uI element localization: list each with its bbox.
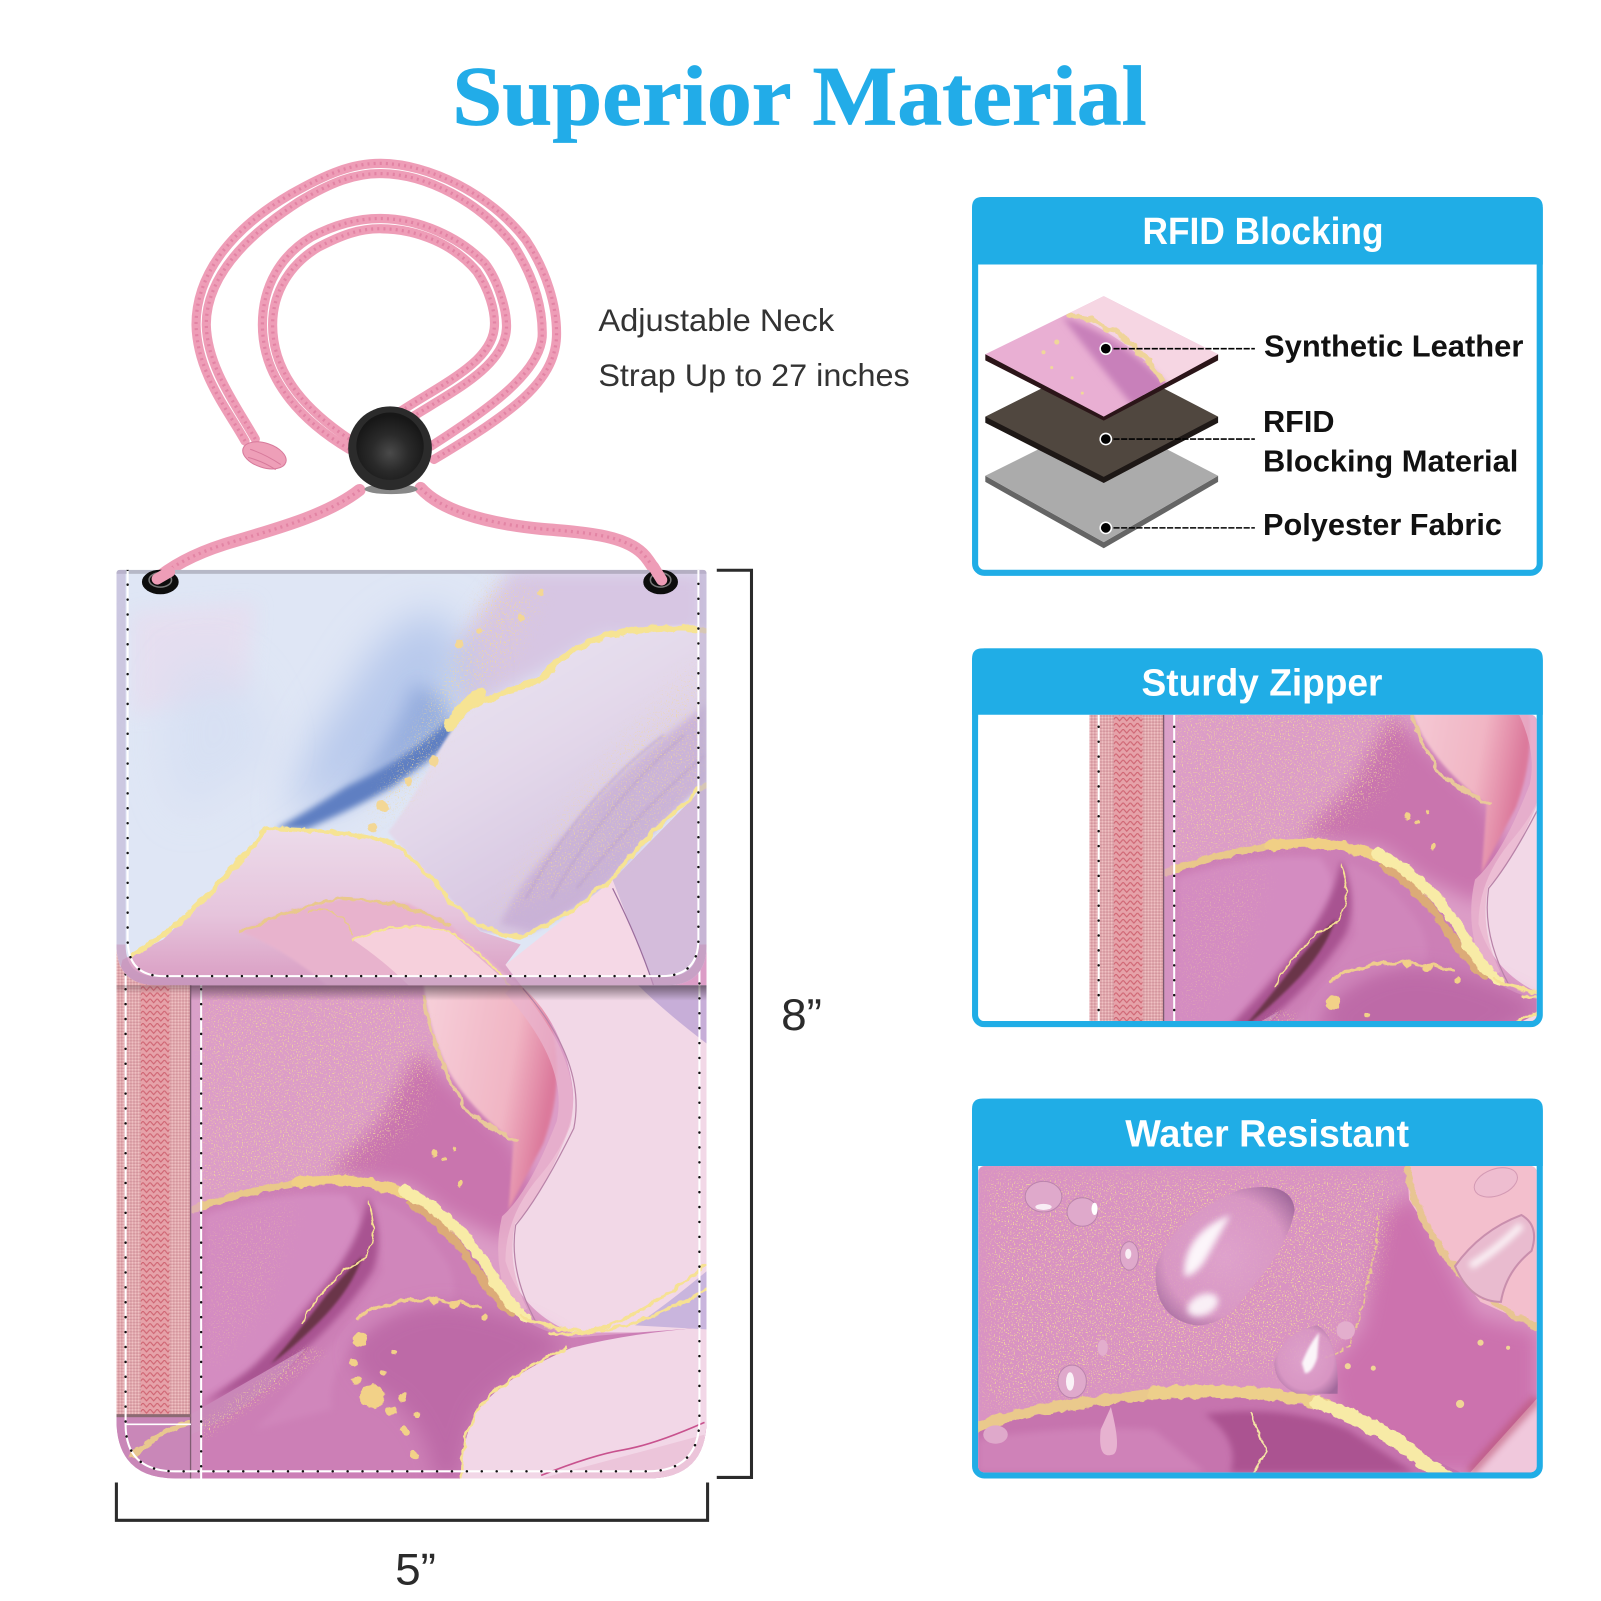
height label: 8” [781, 989, 822, 1040]
panel frame [975, 1102, 1540, 1475]
panel header [972, 648, 1543, 715]
callout: synthetic leather [1100, 329, 1523, 363]
panel: Water Resistant [972, 1099, 1543, 1478]
panel frame [975, 200, 1540, 573]
left grommet [142, 570, 179, 594]
width label: 5” [395, 1544, 436, 1595]
layer: RFID blocking material [985, 357, 1218, 483]
panel: Sturdy Zipper [972, 648, 1543, 1028]
marble close-up [978, 1166, 1537, 1478]
pouch flap [116, 570, 707, 985]
rope ends [157, 567, 662, 580]
pouch [116, 567, 707, 1478]
panel heading: RFID Blocking [1143, 211, 1384, 253]
water droplets [983, 1162, 1534, 1455]
panel heading: Water Resistant [1125, 1114, 1409, 1156]
height dimension bracket [717, 570, 751, 1477]
panel heading: Sturdy Zipper [1142, 662, 1383, 704]
slider toggle [348, 406, 432, 494]
pouch body with zipper [116, 944, 707, 1478]
panel header [972, 1099, 1543, 1166]
layer: polyester fabric [985, 417, 1218, 548]
width dimension bracket [116, 1483, 708, 1520]
strap length caption: Adjustable Neck [598, 302, 834, 338]
strap knot [239, 437, 290, 474]
zipper close-up [978, 714, 1537, 1021]
panel header [972, 197, 1543, 264]
title: Superior Material [452, 50, 1147, 144]
callout: synthetic leather: Synthetic Leather [1264, 329, 1523, 363]
layer: synthetic leather [985, 296, 1218, 420]
callout: RFID blocking material: RFID [1263, 405, 1335, 439]
neck strap with adjuster [153, 163, 662, 582]
right grommet [643, 570, 678, 594]
strap length caption: Strap Up to 27 inches [598, 357, 910, 393]
panel frame [975, 651, 1540, 1024]
panel: RFID Blocking [972, 197, 1543, 573]
callout: RFID blocking material [1100, 405, 1518, 479]
strap rope loops [153, 163, 662, 582]
strap length caption [598, 302, 910, 393]
callout: polyester fabric: Polyester Fabric [1263, 508, 1502, 542]
callout: polyester fabric [1100, 508, 1502, 542]
callout: RFID blocking material: Blocking Material [1263, 445, 1518, 479]
